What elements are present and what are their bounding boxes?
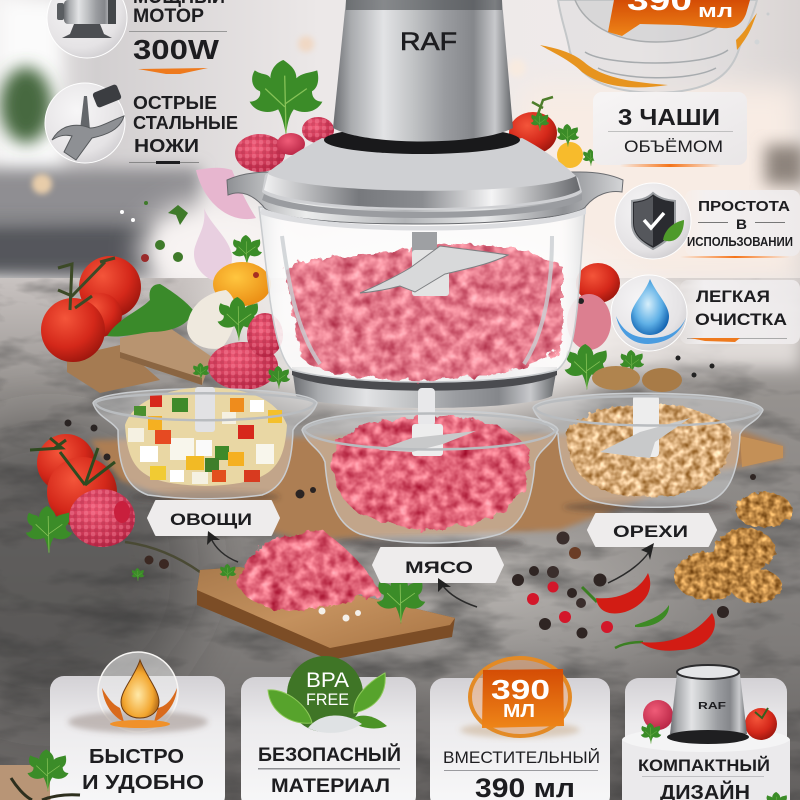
blade icon bubble [45, 83, 125, 163]
label pill: vegetables: ОВОЩИ [170, 510, 252, 529]
tomatoes and herbs behind chopper, right [509, 97, 599, 168]
card: capacious 390 ml: ВМЕСТИТЕЛЬНЫЙ [443, 748, 600, 767]
arrow: to nuts [608, 543, 654, 583]
heading: sharp steel blades: СТАЛЬНЫЕ [133, 112, 238, 133]
parsley and raspberries behind chopper, left [235, 60, 334, 172]
minced meat heap [238, 531, 380, 610]
icon: BPA free badge: BPA [306, 669, 349, 692]
food group: right of chopper [565, 263, 714, 392]
dark collar [324, 126, 520, 154]
bowl backing [259, 207, 585, 382]
card: safe material: МАТЕРИАЛ [271, 776, 390, 797]
icon: shield [615, 183, 691, 259]
rim with handles [227, 172, 623, 224]
blade and spindle [360, 232, 508, 296]
orange label 390 ml [608, 0, 750, 36]
motor icon bubble [47, 0, 127, 58]
card: capacious 390 ml [430, 658, 610, 800]
icon: orange 390 ml badge: 390 [491, 674, 550, 705]
background: blurred kitchen wall [0, 0, 800, 300]
walnuts [674, 492, 792, 603]
wooden boards: back left [67, 326, 212, 393]
icon: orange 390 ml badge [460, 658, 580, 738]
raspberries [208, 342, 278, 390]
lid cone and bands [262, 138, 582, 210]
motor housing [333, 0, 513, 142]
label pill: vegetables [148, 501, 279, 535]
green specks and drops [120, 201, 188, 262]
oil splash [540, 45, 668, 87]
parsley [107, 284, 193, 337]
background: grey marble counter [0, 200, 800, 800]
wood patch, bottom left [0, 765, 60, 800]
peppercorns [64, 420, 756, 638]
main chopper with glass bowl [227, 0, 623, 408]
mini chopper head: RAF [698, 701, 726, 712]
bowl: vegetables [93, 387, 317, 503]
icon: BPA free badge: FREE [306, 690, 349, 709]
panel: 3 bowls: 3 ЧАШИ [618, 104, 720, 130]
panel: easy to use: В [736, 216, 747, 232]
card: safe material [241, 656, 416, 800]
heading: sharp steel blades: НОЖИ [134, 135, 199, 156]
label pill: nuts [588, 514, 716, 546]
bowl: meat [302, 388, 558, 549]
food group: tomatoes and raspberry, lower left [26, 434, 200, 582]
card: compact design: КОМПАКТНЫЙ [638, 756, 770, 775]
label pill: nuts: ОРЕХИ [613, 522, 688, 541]
minced meat in bowl [284, 243, 562, 380]
raspberry and tomato [641, 700, 777, 744]
chopped vegetables [128, 395, 282, 484]
icon: oil drop [68, 652, 208, 733]
garlic bulb [187, 290, 236, 349]
heading: powerful motor: 300W [133, 34, 220, 65]
parsley, bottom right corner [766, 792, 788, 800]
leaf behind orange [232, 235, 262, 266]
heading: sharp steel blades [129, 92, 238, 164]
main chopper with glass bowl: RAF [400, 28, 457, 56]
bowl: nuts [533, 393, 763, 513]
wooden board with meat [197, 531, 455, 660]
wooden board: under bowls [90, 432, 783, 540]
panel: easy cleaning [611, 275, 800, 351]
orange [213, 262, 271, 306]
panel: 3 bowls [593, 92, 747, 167]
label pill: meat: МЯСО [405, 558, 473, 577]
food group: left of chopper [41, 168, 290, 390]
heading: powerful motor: МОТОР [133, 6, 204, 27]
glass bowl [259, 207, 585, 382]
panel: easy to use: ПРОСТОТА [698, 198, 790, 215]
arrow: to vegetables [207, 531, 238, 562]
orange label 390 ml: мл [698, 1, 733, 21]
chopper base [292, 367, 557, 408]
icon: orange 390 ml badge: МЛ [503, 701, 535, 721]
heading: sharp steel blades: ОСТРЫЕ [133, 92, 217, 113]
icon: BPA free badge [268, 656, 387, 733]
card: safe material: БЕЗОПАСНЫЙ [258, 744, 401, 766]
label pill: meat [373, 548, 503, 582]
panel: easy cleaning: ЛЕГКАЯ [696, 288, 770, 306]
mini chopper head [667, 665, 749, 744]
card: fast and easy: И УДОБНО [82, 772, 204, 794]
tomatoes [41, 256, 141, 362]
card: fast and easy [50, 652, 225, 800]
parsley and stems, bottom left corner [11, 750, 80, 800]
arrow: to meat [438, 578, 477, 607]
onion slice and garlic clove [196, 168, 256, 219]
panel: easy to use [615, 183, 800, 259]
card: fast and easy: БЫСТРО [89, 746, 184, 768]
panel: 3 bowls: ОБЪЁМОМ [624, 137, 723, 156]
panel: easy cleaning: ОЧИСТКА [695, 311, 787, 329]
heading: powerful motor [129, 0, 227, 74]
icon: water drop [611, 275, 687, 351]
chili peppers [582, 573, 715, 651]
card: compact design [622, 665, 790, 800]
glass bowl with oil splash, top right [540, 0, 770, 93]
